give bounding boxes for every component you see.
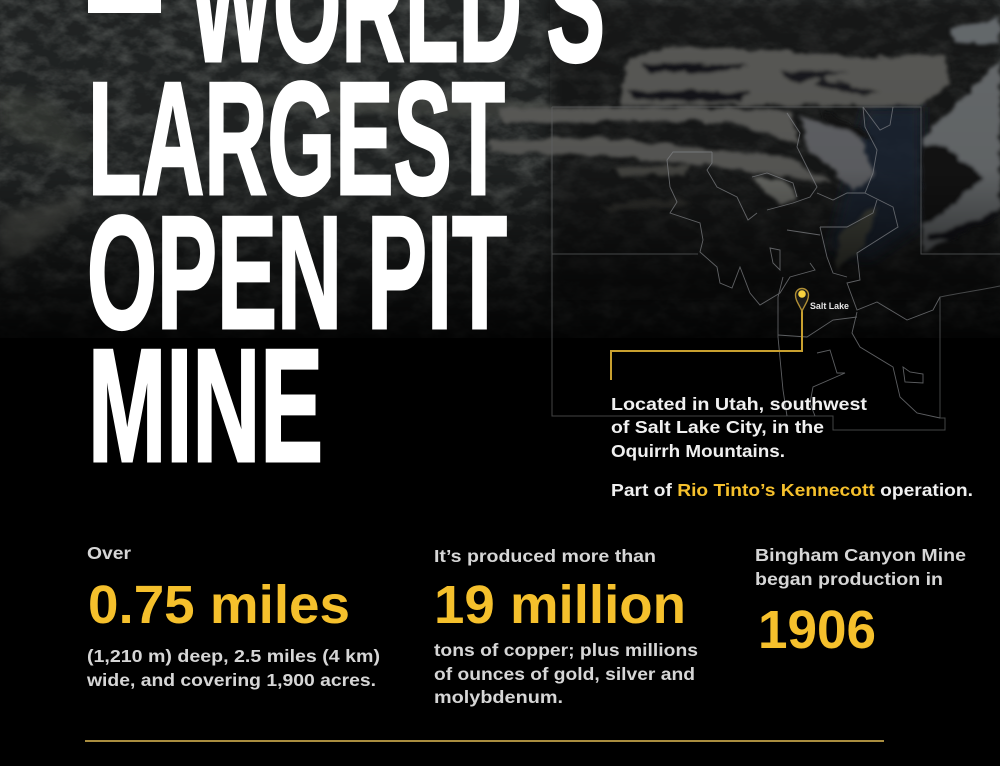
title line: LARGEST: LARGEST (88, 49, 505, 229)
stat: copper production: 19 million (434, 575, 686, 635)
stat: copper production: tons of copper; plus millions (434, 640, 698, 660)
stat: copper production: It’s produced more than (434, 546, 656, 566)
title (87, 0, 605, 496)
title dash (88, 0, 161, 13)
location text (611, 394, 973, 500)
pin label: Salt Lake (810, 301, 849, 311)
stat: start of production: began production in (755, 569, 943, 589)
stat: depth: (1,210 m) deep, 2.5 miles (4 km) (87, 646, 380, 666)
title line: MINE: MINE (88, 316, 323, 496)
stat: depth (86, 543, 380, 690)
icon: Salt Lake map pin with leader line (611, 288, 849, 380)
stat: start of production (755, 545, 966, 660)
stat: start of production: Bingham Canyon Mine (755, 545, 966, 565)
map of Utah with county outlines (552, 107, 1000, 430)
title line: OPEN PIT: OPEN PIT (87, 183, 507, 363)
stat: copper production: molybdenum. (434, 687, 563, 707)
stat: depth: wide, and covering 1,900 acres. (86, 670, 376, 690)
stat: start of production: 1906 (758, 600, 876, 660)
stat: copper production (434, 546, 698, 707)
pin (796, 288, 808, 311)
background photo: open pit mine terraces (0, 0, 1000, 338)
location text: Oquirrh Mountains. (611, 441, 785, 461)
stat: depth: 0.75 miles (88, 575, 350, 635)
stat: depth: Over (87, 543, 131, 563)
location text: Located in Utah, southwest (611, 394, 867, 414)
location text: of Salt Lake City, in the (611, 417, 824, 437)
leader line (611, 310, 802, 380)
location text: Part of Rio Tinto’s Kennecott operation. (611, 480, 973, 500)
stat: copper production: of ounces of gold, silver and (434, 664, 695, 684)
